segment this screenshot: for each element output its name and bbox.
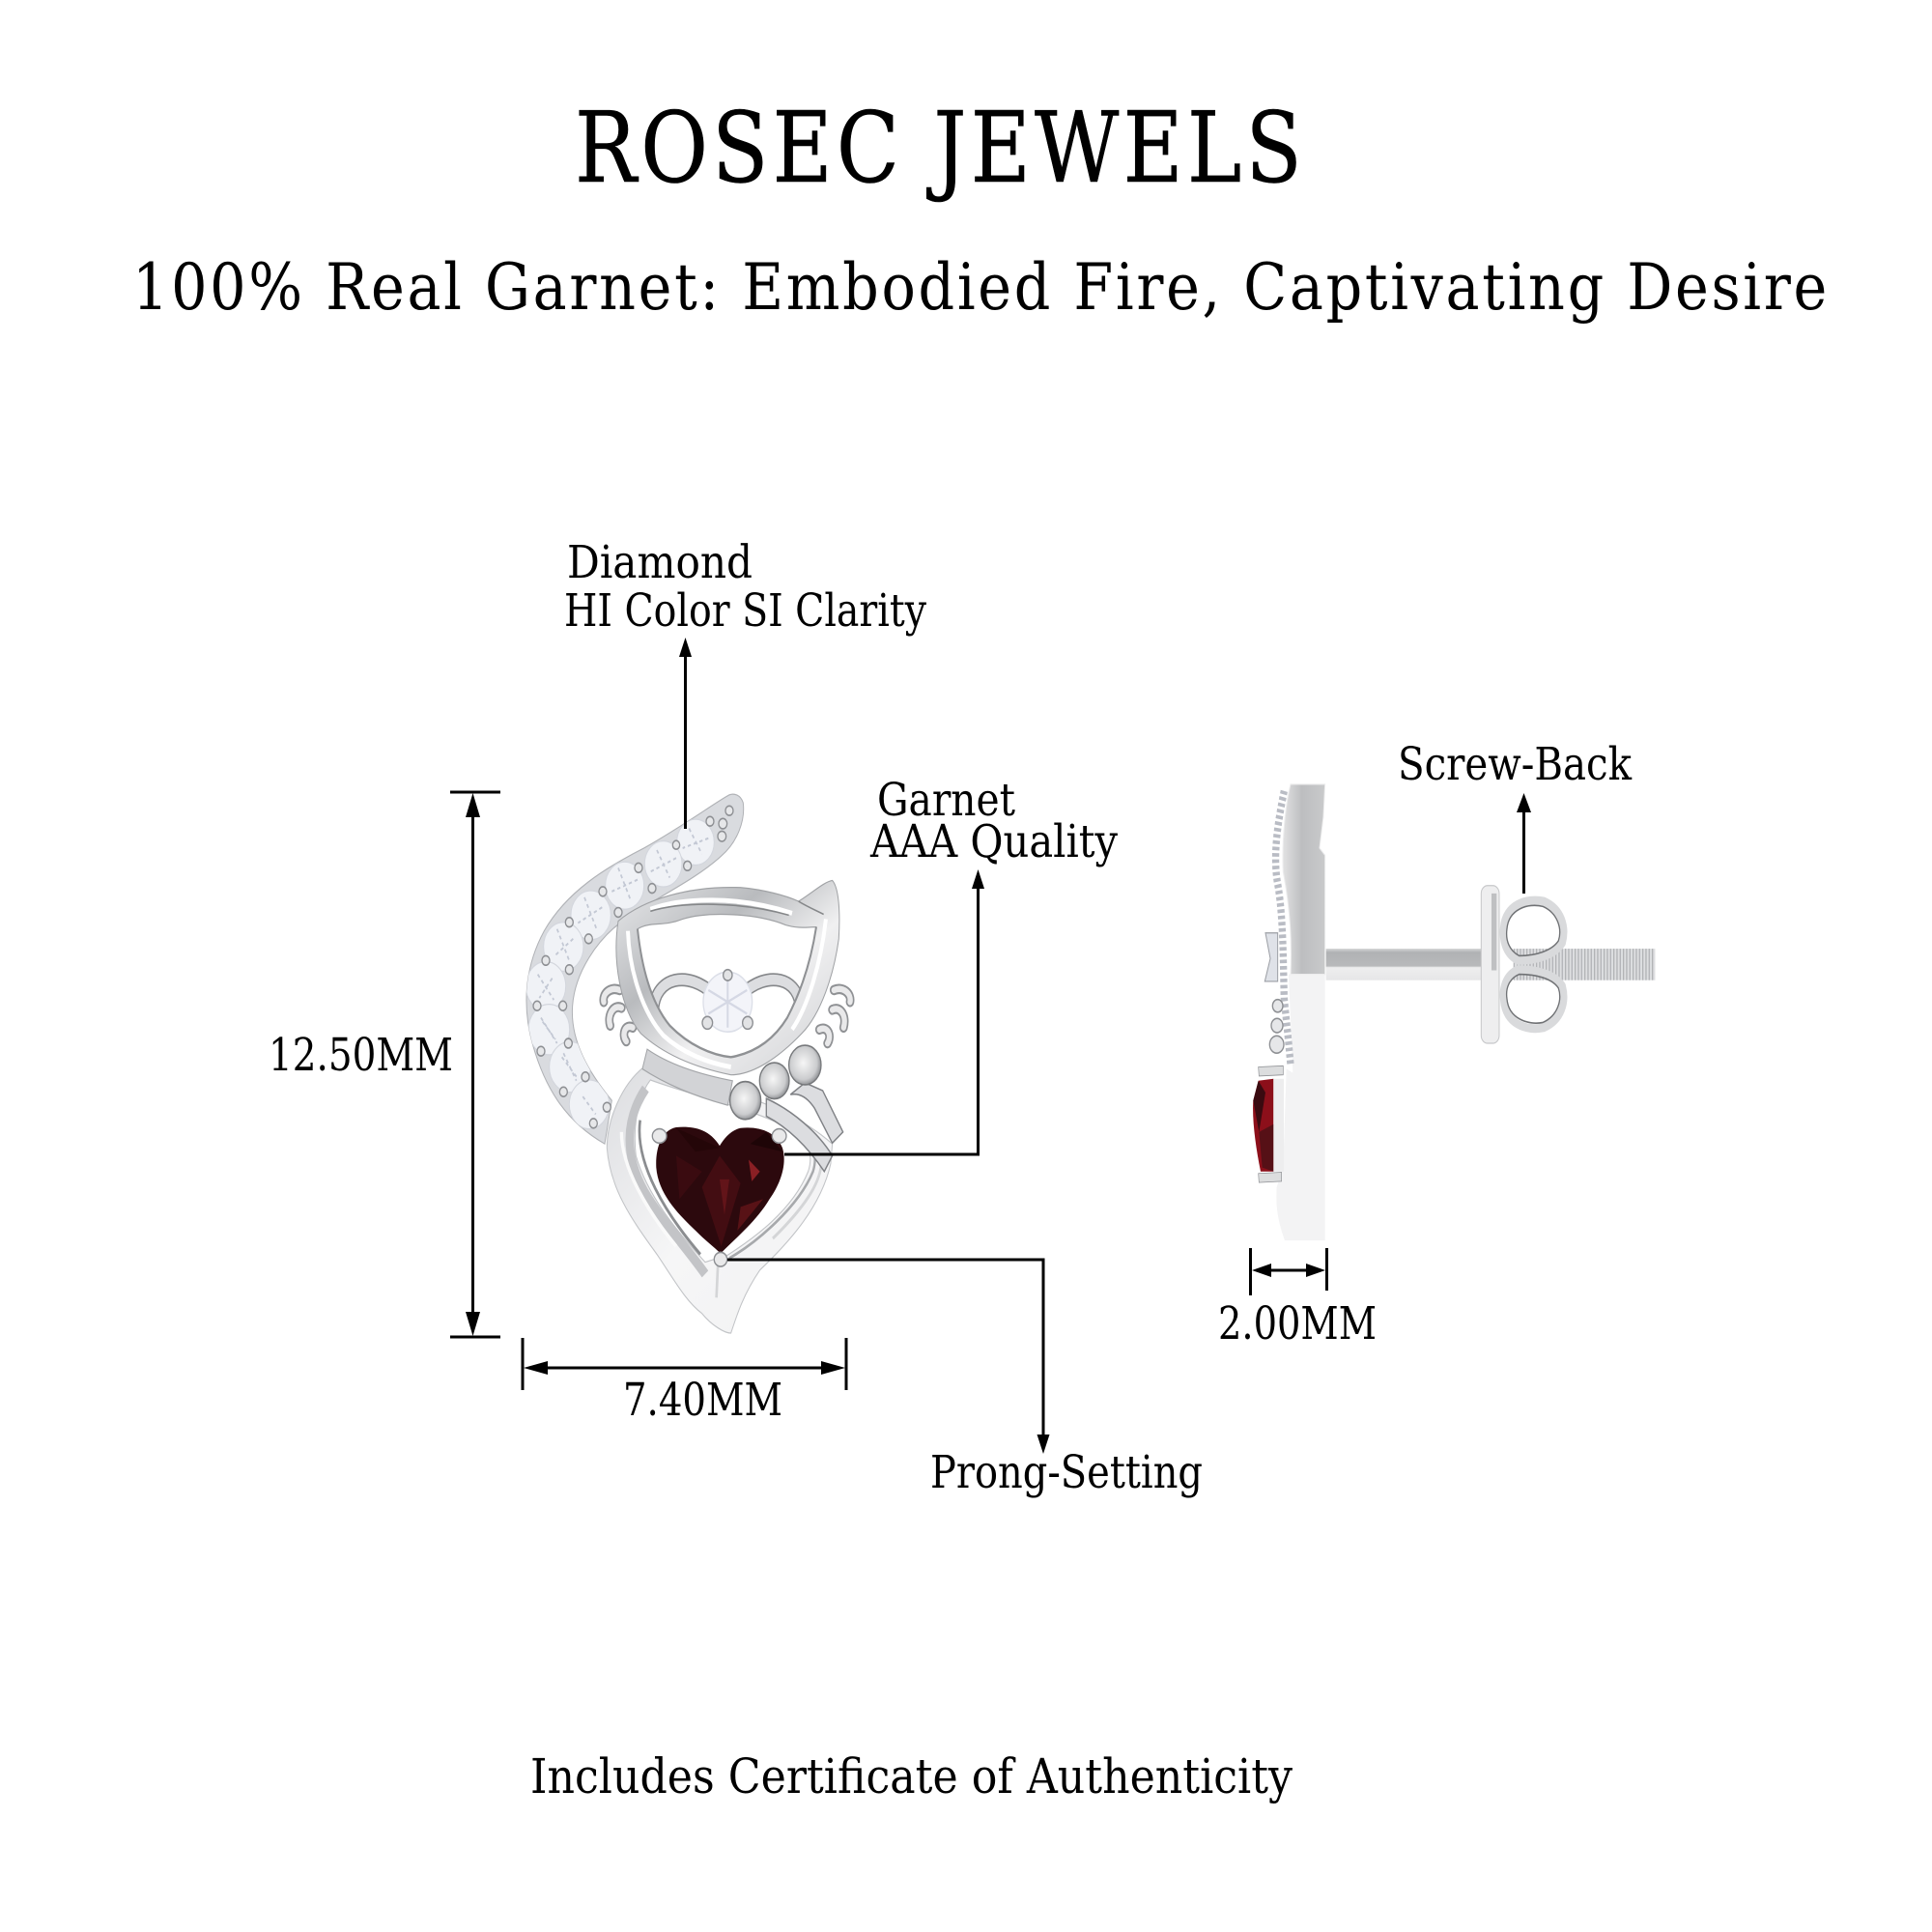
label: diamond	[564, 536, 926, 638]
dimension: height	[450, 792, 500, 1337]
tail with pave diamonds	[526, 794, 744, 1144]
label: garnet	[869, 774, 1118, 868]
screw thread	[1514, 949, 1655, 980]
dimension: width	[523, 1338, 846, 1390]
gemstone prongs	[652, 1129, 786, 1266]
collar beads	[730, 1045, 821, 1120]
center diamond	[702, 970, 753, 1032]
label: height value: 12.50MM	[269, 1029, 453, 1082]
cat head	[616, 880, 839, 1075]
label: width value: 7.40MM	[623, 1374, 782, 1427]
post	[1326, 949, 1482, 980]
inner body shine	[621, 1089, 821, 1297]
arrow: screw-back leader	[1517, 793, 1531, 894]
cat body	[607, 1067, 833, 1333]
whiskers	[604, 989, 850, 1043]
dimension: thickness	[1250, 1248, 1327, 1295]
arrow: prong leader	[727, 1260, 1049, 1454]
icon: side view earring	[1253, 784, 1655, 1240]
arrow: garnet leader	[784, 869, 984, 1154]
label: thickness value: 2.00MM	[1218, 1297, 1377, 1350]
label: garnet: AAA Quality	[869, 815, 1118, 868]
label: diamond: HI Color SI Clarity	[564, 584, 926, 638]
title: ROSEC JEWELS	[575, 91, 1306, 205]
lower plate	[1276, 975, 1325, 1240]
arrow: diamond leader	[679, 638, 692, 829]
front plate	[1283, 784, 1325, 975]
pave stones edge	[1264, 791, 1291, 1065]
label: screw-back: Screw-Back	[1398, 738, 1632, 791]
label: prong setting: Prong-Setting	[930, 1446, 1203, 1499]
collar	[642, 1049, 732, 1105]
ribbon	[766, 1083, 843, 1172]
butterfly loops	[1503, 900, 1564, 1029]
label: garnet: Garnet	[877, 774, 1015, 827]
side garnet	[1253, 1065, 1284, 1182]
eyes	[654, 980, 800, 1009]
heart garnet	[656, 1127, 784, 1254]
footer note: Includes Certificate of Authenticity	[530, 1748, 1293, 1804]
label: diamond: Diamond	[567, 536, 753, 589]
screw back disc	[1481, 886, 1499, 1043]
icon: front view cat earring	[526, 794, 850, 1333]
